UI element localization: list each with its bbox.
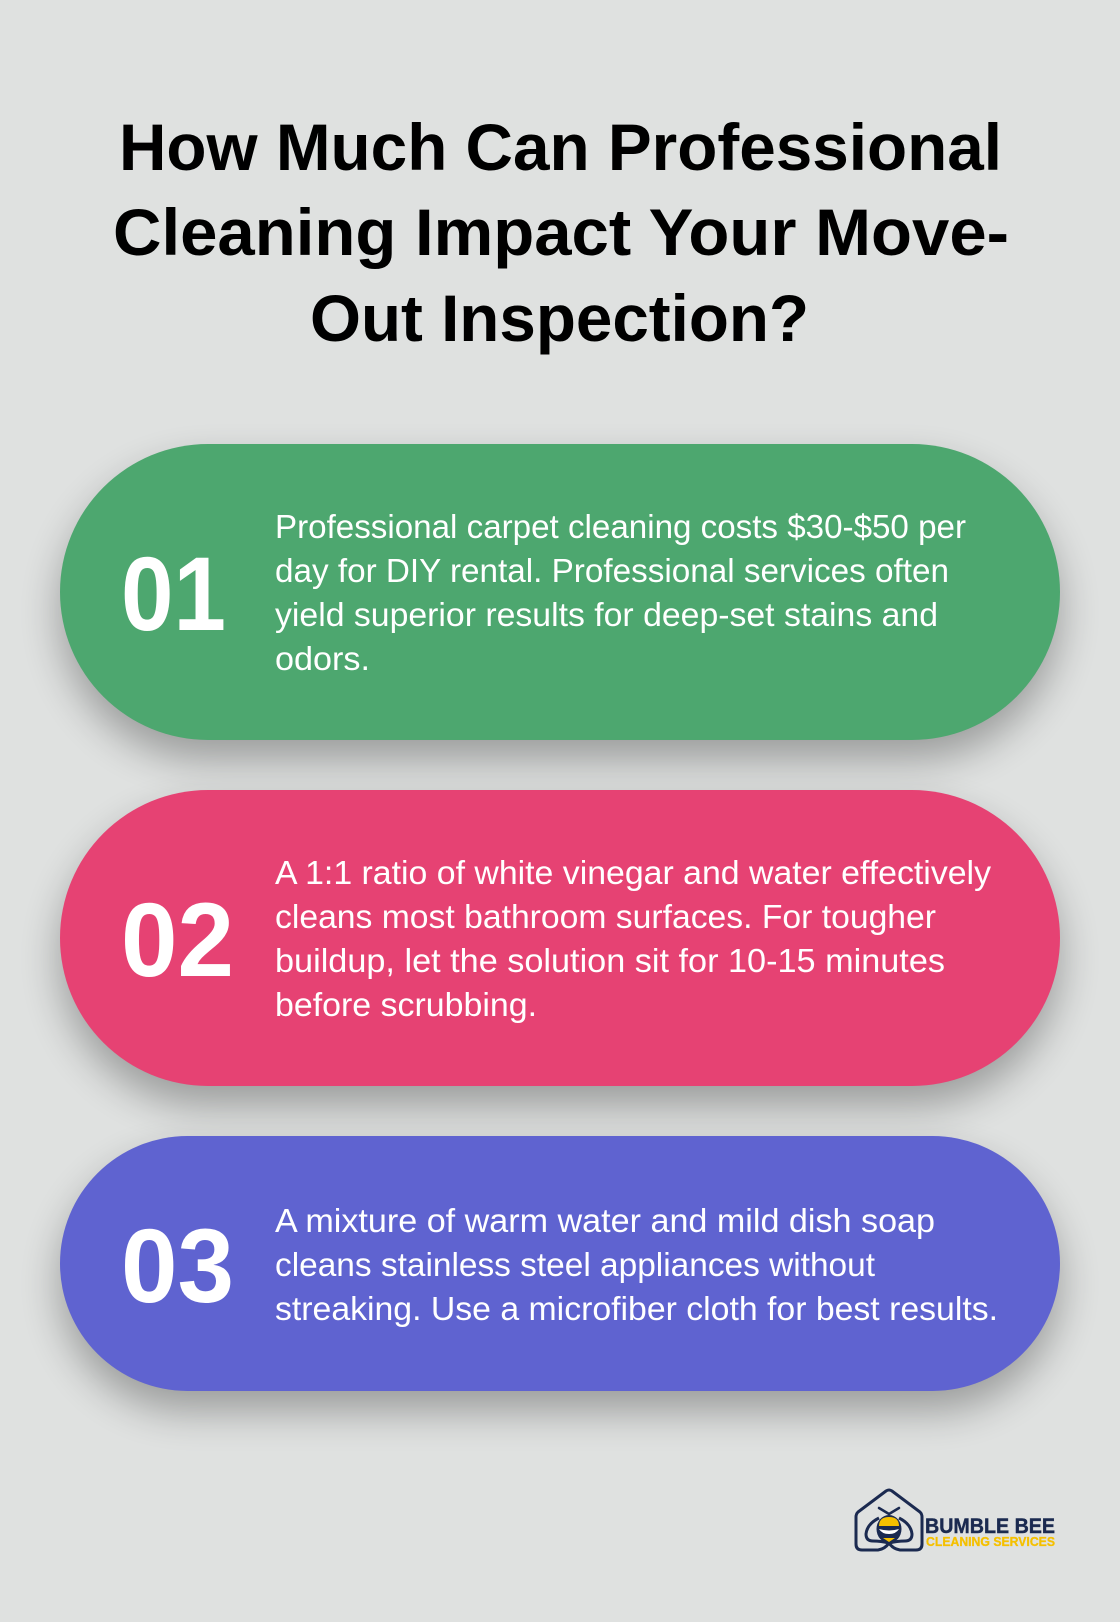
step 02 text: buildup, let the solution sit for 10-15 minutes bbox=[275, 942, 945, 979]
panel: step 03 bbox=[60, 1136, 1060, 1411]
step 01 text: yield superior results for deep-set stains and bbox=[275, 596, 938, 633]
step number 03: 03 bbox=[121, 1208, 234, 1325]
step 03 text: streaking. Use a microfiber cloth for best results. bbox=[275, 1290, 998, 1327]
step number 02: 02 bbox=[121, 882, 234, 999]
step 01 text: Professional carpet cleaning costs $30-$50 per bbox=[275, 508, 966, 545]
icon: bee in house bbox=[856, 1490, 922, 1550]
logo: Bumble Bee Cleaning Services bbox=[856, 1490, 1055, 1550]
step 03 text: cleans stainless steel appliances without bbox=[275, 1246, 875, 1283]
step 02 text: cleans most bathroom surfaces. For tougher bbox=[275, 898, 936, 935]
logo tagline: CLEANING SERVICES bbox=[926, 1535, 1055, 1549]
step 01 text bbox=[275, 508, 966, 677]
step 02 text bbox=[275, 854, 992, 1023]
step 02 text: A 1:1 ratio of white vinegar and water effectively bbox=[275, 854, 992, 891]
logo wordmark: BUMBLE BEE bbox=[925, 1515, 1055, 1538]
panel: step 02 bbox=[60, 790, 1060, 1106]
title bbox=[113, 110, 1009, 355]
step 03 text: A mixture of warm water and mild dish soap bbox=[275, 1202, 935, 1239]
step number 01: 01 bbox=[121, 536, 226, 653]
panel: step 01 bbox=[60, 444, 1060, 760]
title: Out Inspection? bbox=[310, 281, 809, 355]
step 02 text: before scrubbing. bbox=[275, 986, 537, 1023]
step 03 text bbox=[275, 1202, 998, 1327]
step 01 text: day for DIY rental. Professional services often bbox=[275, 552, 949, 589]
title: Cleaning Impact Your Move- bbox=[113, 195, 1009, 269]
step 01 text: odors. bbox=[275, 640, 370, 677]
title: How Much Can Professional bbox=[119, 110, 1002, 184]
